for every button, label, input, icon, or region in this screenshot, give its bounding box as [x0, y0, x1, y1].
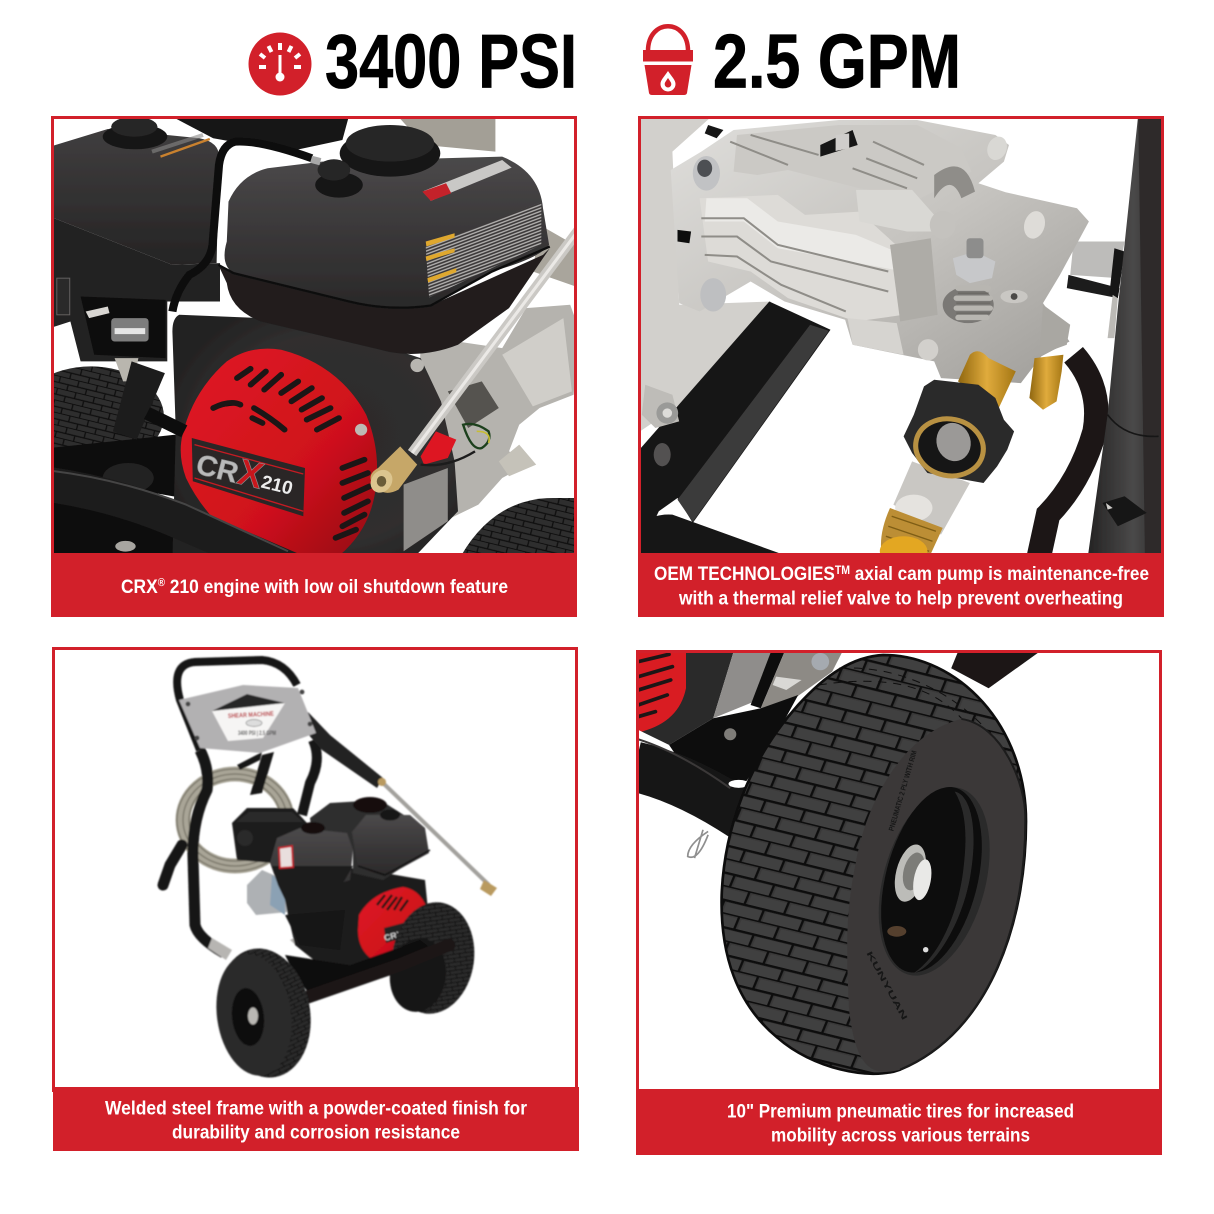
caption banner [636, 1089, 1162, 1155]
panel: pump [635, 115, 1179, 617]
base frame [284, 940, 428, 992]
photo: 10 inch pneumatic tire close-up: PNEUMATIC 2 PLY WITH RIM [887, 750, 919, 832]
caption line 2: mobility across various terrains [771, 1124, 1030, 1146]
engine block [280, 868, 430, 965]
photo: 10 inch pneumatic tire close-up: KUNYUAN [864, 950, 909, 1022]
heading: 2.5 GPM: 2.5 GPM [713, 20, 961, 104]
panel frame [640, 118, 1162, 558]
caption banner [51, 553, 577, 617]
handle frame [177, 660, 297, 750]
control panel: 3400 PSI | 2.5 GPM [238, 731, 276, 737]
caption line 2: durability and corrosion resistance [172, 1122, 460, 1144]
control panel [179, 685, 316, 753]
photo: complete pressure washer [163, 660, 497, 1085]
panel frame [638, 652, 1160, 1092]
photo: CRX 210 engine close-up: CRX [193, 440, 268, 497]
rear wheel [392, 901, 476, 1015]
hose coil [177, 769, 293, 871]
hose straps [237, 752, 274, 795]
panel frame [54, 648, 576, 1090]
panel frame [52, 118, 576, 558]
caption banner [638, 553, 1164, 617]
silver pump [247, 870, 288, 915]
rear fuel tank [269, 827, 354, 882]
caption line 1: TM [835, 563, 850, 577]
header: spec icons and values [248, 20, 961, 104]
caption text: CRX [121, 576, 162, 598]
spray gun [300, 712, 383, 788]
icon: pressure gauge [248, 32, 312, 96]
caption line 1: 10" Premium pneumatic tires for increased [727, 1100, 1074, 1122]
caption line 1: Welded steel frame with a powder-coated finish for [105, 1098, 527, 1120]
photo: CRX 210 engine close-up [54, 119, 574, 553]
caption text: 210 engine with low oil shutdown feature [165, 576, 508, 598]
caption line 1: axial cam pump is maintenance-free [850, 563, 1149, 585]
caption line 2: with a thermal relief valve to help prevent overheating [678, 588, 1123, 610]
photo: CRX 210 engine close-up: 210 [259, 471, 295, 499]
recoil cover [358, 887, 429, 960]
caption line 1: OEM TECHNOLOGIES [654, 563, 860, 585]
rear recoil housing [232, 808, 307, 863]
photo: axial cam pump close-up [635, 115, 1179, 566]
heading: 3400 PSI: 3400 PSI [325, 20, 577, 104]
panel: pneumatic tire [635, 652, 1162, 1155]
photo: complete pressure washer: CRX 210 [383, 924, 421, 943]
icon: water bucket [643, 26, 693, 95]
fuel tank [309, 800, 404, 880]
control panel: SHEAR MACHINE [228, 711, 275, 720]
front wheel [231, 947, 312, 1079]
panel: engine [18, 115, 580, 617]
caption banner [53, 1087, 579, 1151]
photo: 10 inch pneumatic tire close-up [635, 652, 1040, 1074]
caption text: ® [158, 577, 165, 589]
panel: steel frame, full machine [53, 648, 579, 1151]
hanging hose grip [163, 845, 182, 885]
